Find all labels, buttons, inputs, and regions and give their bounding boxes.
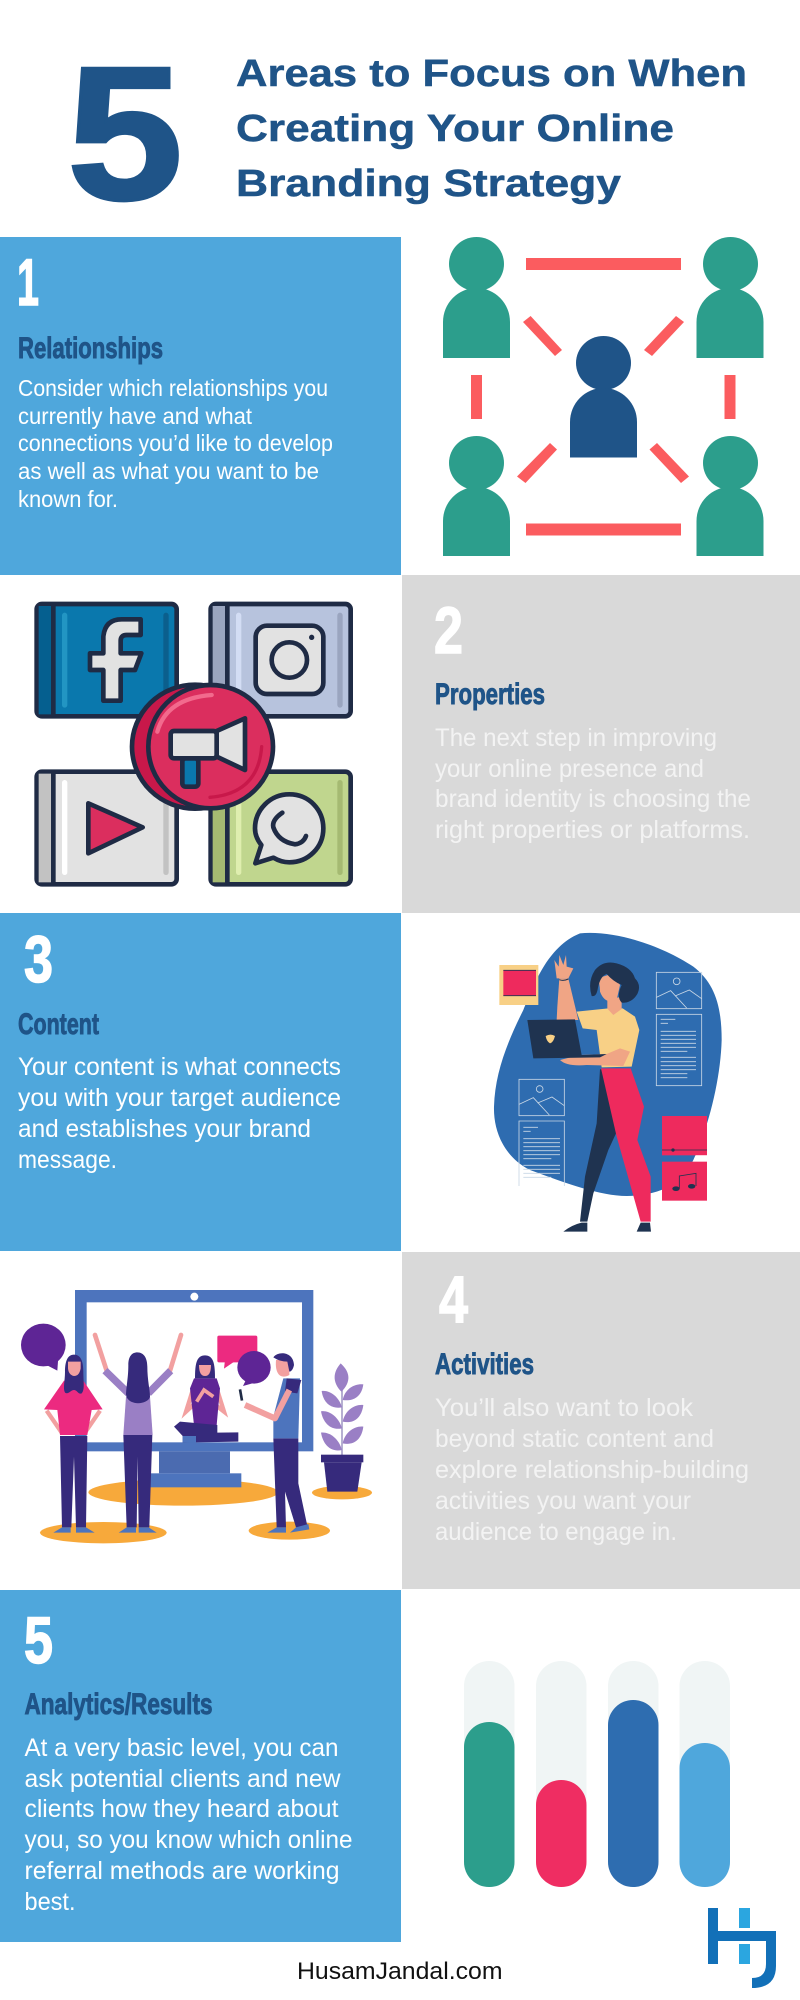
number 4: 4 (439, 1262, 468, 1336)
number 1: 1 (17, 245, 39, 319)
icon: video play card (37, 772, 177, 884)
icon: social media cards with megaphone (37, 604, 351, 884)
text: relationships body: currently have and what (18, 403, 253, 429)
image and document outlines (519, 972, 702, 1186)
chart: rounded bars (464, 1661, 730, 1887)
text: analytics body: best. (24, 1888, 76, 1916)
icon: instagram card (211, 604, 351, 716)
person with raised arms (95, 1335, 181, 1533)
heading: properties: Properties (435, 678, 545, 711)
title text (236, 53, 747, 205)
heading: activities: Activities (435, 1348, 534, 1381)
title text: Creating Your Online (236, 108, 674, 150)
text: activities body: audience to engage in. (435, 1518, 677, 1546)
person standing in pink (44, 1355, 103, 1533)
number 3: 3 (24, 922, 53, 996)
text: analytics body: referral methods are working (24, 1857, 340, 1885)
heading: analytics/results: Analytics/Results (24, 1688, 212, 1721)
text: relationships body (18, 375, 333, 512)
text: activities body: beyond static content and (435, 1425, 714, 1453)
text: analytics body: clients how they heard about (24, 1795, 339, 1823)
red card with frame (499, 965, 538, 1005)
text: relationships body: known for. (18, 486, 118, 512)
text: activities body: activities you want your (435, 1487, 691, 1515)
text: properties body: right properties or platforms. (435, 816, 750, 844)
text: relationships body: Consider which relationships you (18, 375, 328, 401)
text: analytics body: At a very basic level, you can (24, 1734, 338, 1762)
speech bubble purple left (21, 1324, 66, 1371)
panel: analytics/results (0, 1590, 401, 1942)
red media cards (662, 1116, 707, 1201)
text: analytics body: ask potential clients and new (24, 1765, 341, 1793)
panel: relationships (0, 237, 401, 575)
orange floor ellipses (40, 1479, 372, 1543)
panel: activities (402, 1252, 800, 1589)
number 2: 2 (434, 593, 463, 667)
potted plant (321, 1363, 363, 1492)
text: activities body (435, 1394, 749, 1546)
number 5: 5 (24, 1603, 53, 1677)
icon: whatsapp card (211, 772, 351, 884)
text: relationships body: as well as what you want to be (18, 458, 319, 484)
footer website: HusamJandal.com (297, 1958, 502, 1985)
text: properties body: your online presence and (435, 755, 704, 783)
icon: network of people (443, 237, 764, 556)
text: analytics body: you, so you know which online (24, 1826, 352, 1854)
text: content body: you with your target audience (18, 1084, 341, 1112)
text: analytics body (24, 1734, 352, 1916)
blue blob background (494, 933, 722, 1196)
heading: relationships: Relationships (18, 332, 163, 365)
person with phone (239, 1353, 309, 1533)
text: relationships body: connections you’d like to develop (18, 430, 333, 456)
panel: content (0, 913, 401, 1251)
text: properties body: brand identity is choosing the (435, 785, 751, 813)
text: activities body: explore relationship-building (435, 1456, 749, 1484)
text: properties body: The next step in improving (435, 724, 717, 752)
illustration: people around a monitor (21, 1290, 372, 1543)
big numeral 5: 5 (67, 28, 183, 240)
text: activities body: You’ll also want to look (435, 1394, 694, 1422)
monitor (75, 1290, 313, 1487)
title text: Areas to Focus on When (236, 53, 747, 95)
text: content body: message. (18, 1146, 117, 1174)
title text: Branding Strategy (236, 163, 621, 205)
speech bubble pink (217, 1336, 257, 1369)
text: content body (18, 1053, 341, 1174)
text: properties body (435, 724, 751, 844)
illustration: woman with laptop (494, 933, 722, 1232)
heading: content: Content (18, 1008, 99, 1041)
speech bubble purple right (237, 1351, 271, 1386)
logo: HJ monogram (708, 1908, 776, 1988)
icon: facebook card (37, 604, 177, 716)
header title block (67, 28, 747, 240)
panel: properties (402, 575, 800, 913)
icon: megaphone button (132, 685, 273, 809)
woman figure (527, 955, 651, 1232)
text: content body: and establishes your brand (18, 1115, 311, 1143)
text: content body: Your content is what connects (18, 1053, 341, 1081)
person sitting cross-legged (174, 1355, 238, 1443)
